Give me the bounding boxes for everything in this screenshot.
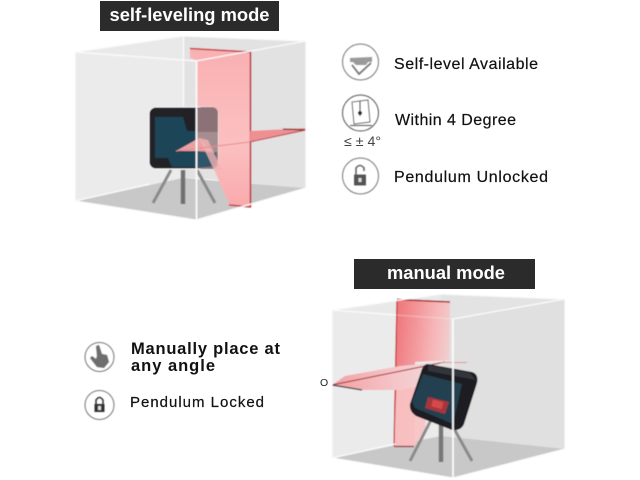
icon: pendulum unlocked (342, 158, 378, 194)
illustration: self-leveling cube with laser (75, 36, 306, 221)
text: within 4 degree: Within 4 Degree (395, 112, 516, 129)
vertical laser plane (394, 299, 450, 447)
text: self-level available: Self-level Available (394, 56, 538, 73)
label: manual mode (354, 259, 535, 289)
text: manually place at any angle: Manually place at (131, 340, 280, 358)
cube edges (332, 294, 565, 478)
icon: hand (85, 342, 114, 372)
label: manual mode: manual mode (387, 263, 505, 283)
marker: O: O (320, 377, 328, 389)
cube faces (75, 36, 306, 220)
horizontal laser plane (250, 128, 306, 142)
text: manually place at any angle (131, 340, 280, 375)
icon: within 4 degree (342, 95, 378, 131)
caption: tolerance: ≤ ± 4° (344, 134, 381, 149)
cube faces (332, 294, 565, 478)
vertical laser plane (190, 48, 251, 207)
label: self-leveling mode: self-leveling mode (110, 5, 270, 25)
label: self-leveling mode (100, 1, 279, 31)
text: pendulum locked: Pendulum Locked (130, 394, 264, 411)
tripod (410, 420, 472, 462)
text: pendulum unlocked: Pendulum Unlocked (394, 169, 548, 186)
tripod (153, 170, 215, 204)
horizontal laser plane (332, 362, 467, 390)
laser device (149, 107, 250, 170)
icon: pendulum locked (85, 390, 114, 420)
cube edges (75, 36, 306, 221)
laser device (410, 364, 477, 430)
icon: self-level available (342, 44, 378, 80)
text: manually place at any angle: any angle (131, 357, 215, 375)
illustration: manual mode cube with laser (332, 294, 565, 478)
